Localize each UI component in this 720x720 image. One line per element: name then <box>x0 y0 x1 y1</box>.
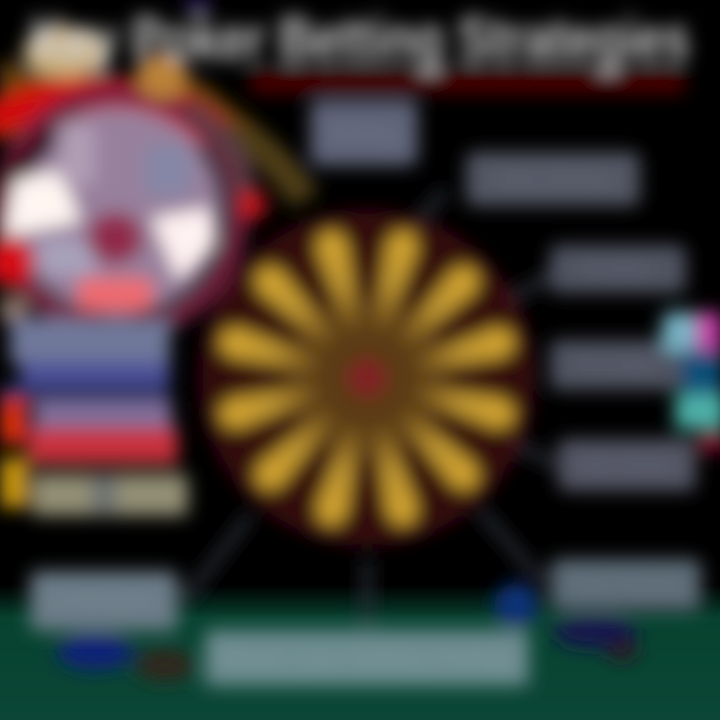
right label 2 <box>550 245 686 293</box>
right label 4 <box>558 439 696 491</box>
connector lines <box>185 190 555 625</box>
left wheel <box>0 60 305 330</box>
gold blobs near title <box>23 26 107 78</box>
petals <box>215 226 519 530</box>
pink lower segment <box>78 278 152 312</box>
panel: blue <box>10 318 170 364</box>
red backing <box>217 228 517 528</box>
icon: colourful chip <box>662 312 720 452</box>
white segments <box>4 170 80 236</box>
right label 5: Slow Playing <box>570 575 682 595</box>
wheel hub <box>87 212 143 264</box>
right label 4: Bet Sizing <box>583 455 671 475</box>
right label 5 <box>551 559 701 611</box>
right label 1: Value Betting <box>496 169 610 189</box>
orange corner <box>0 60 260 140</box>
bottom centre banner: Master your betting strategy <box>219 645 516 670</box>
right label 3 <box>550 340 682 390</box>
title band <box>250 70 685 94</box>
dark notch <box>0 125 60 195</box>
bottom centre banner <box>205 630 529 686</box>
hub <box>285 296 449 460</box>
panel: red <box>34 402 172 428</box>
bottom left label <box>30 571 178 631</box>
left stacked panels <box>0 318 188 516</box>
right label 2: Position <box>582 259 654 279</box>
panel: beige <box>32 474 188 516</box>
green table <box>0 585 720 720</box>
centre dot <box>347 358 387 398</box>
right label 1 <box>466 152 640 206</box>
red side <box>0 238 34 286</box>
bottom left label: Continuation <box>49 590 159 610</box>
outer gold ring <box>190 105 305 200</box>
disc <box>14 108 222 316</box>
chips on table <box>57 583 638 681</box>
right label 3: Pot Odds <box>576 355 656 375</box>
top label: Bluffing <box>330 124 398 144</box>
top label <box>310 100 418 166</box>
red rim <box>0 94 215 135</box>
main wheel <box>207 218 527 538</box>
